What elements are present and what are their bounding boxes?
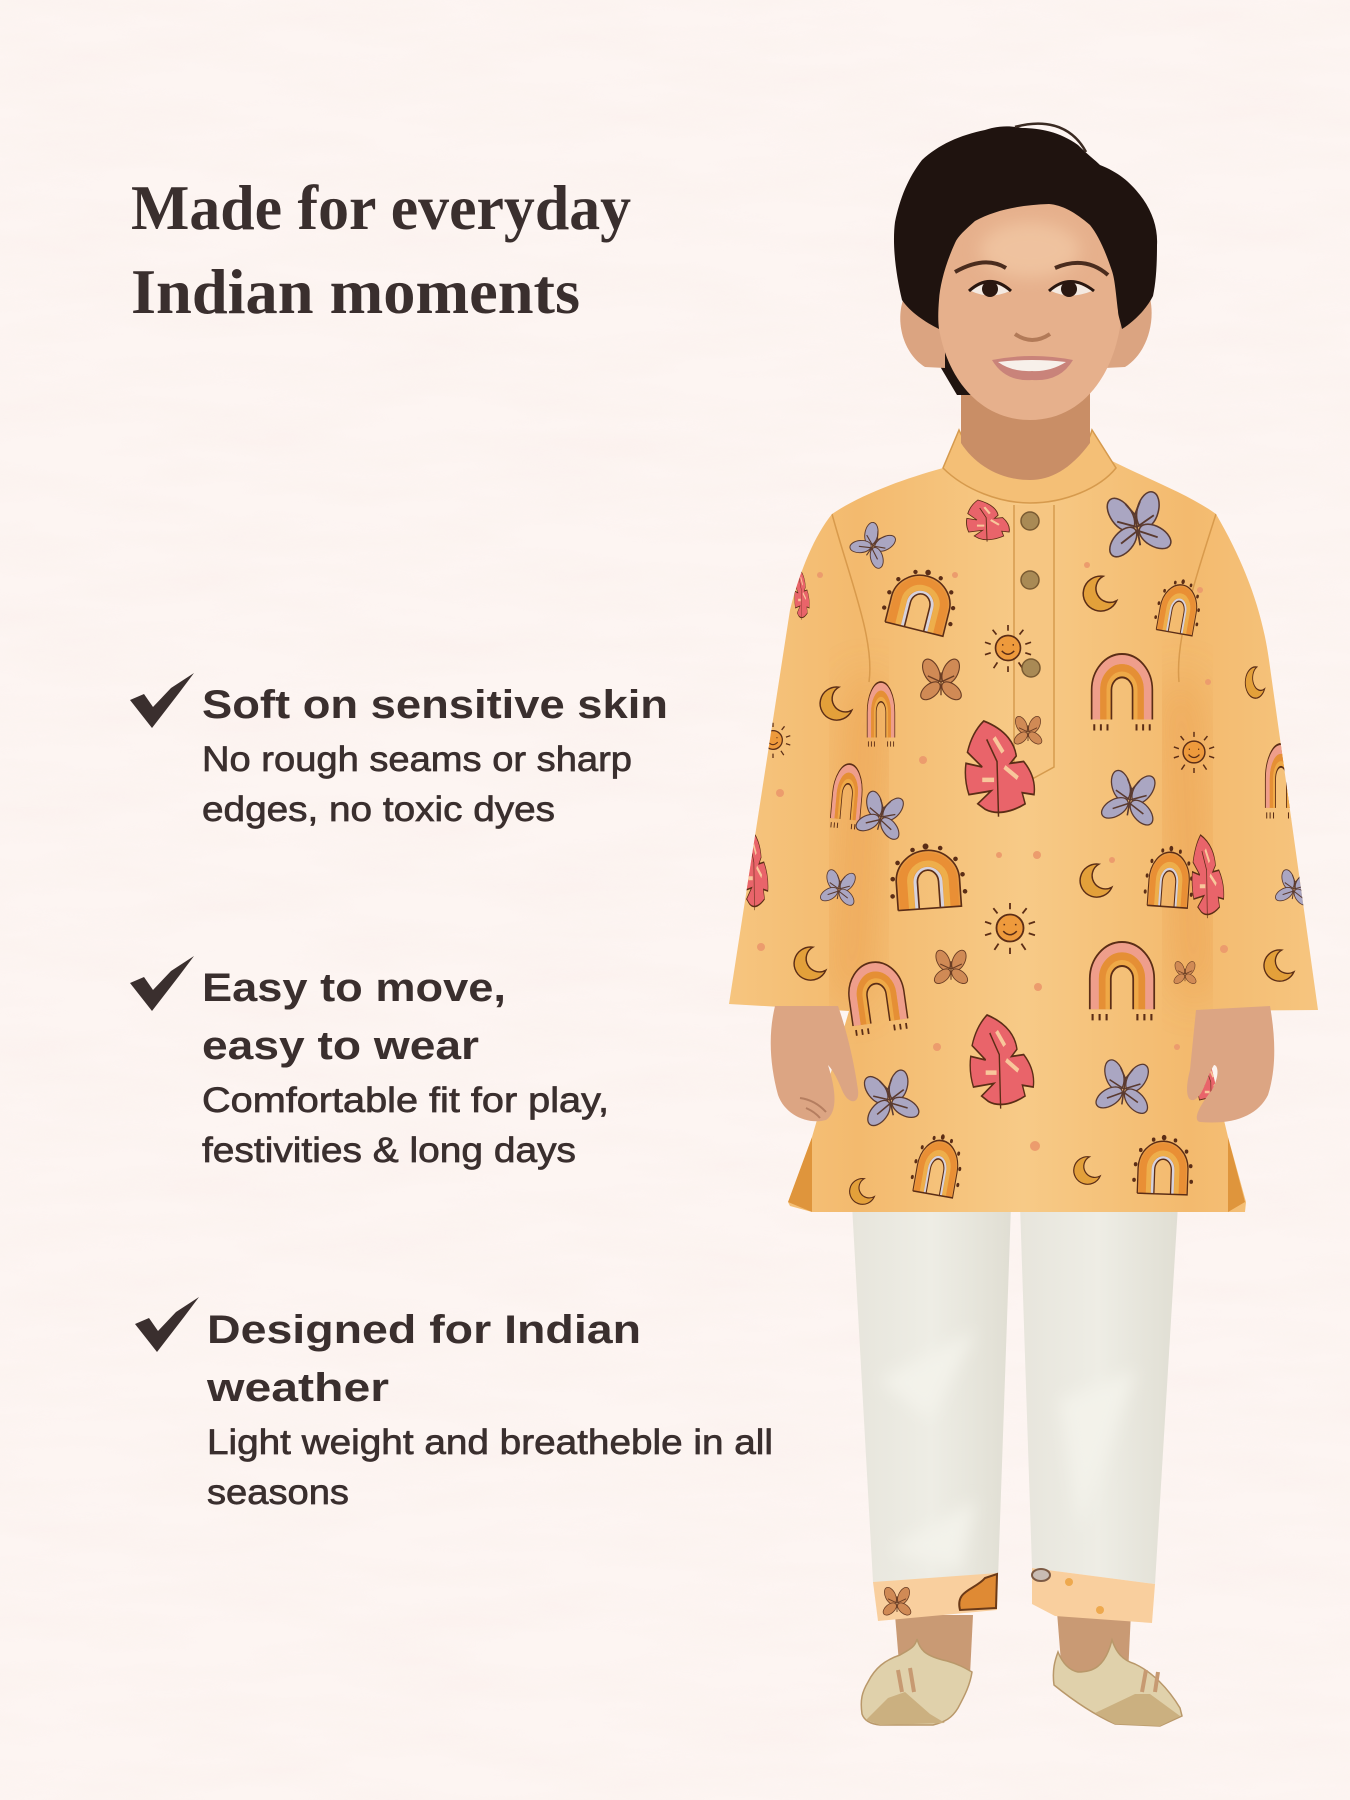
- collar: [943, 430, 1116, 503]
- heading: designed for Indian weather: Designed for Indian: [207, 1308, 641, 1352]
- title: Indian moments: [131, 256, 580, 327]
- nose: [1015, 334, 1050, 340]
- text: light weight: [207, 1423, 773, 1512]
- kurta print motifs: [742, 485, 1317, 1204]
- text: no rough seams: No rough seams or sharp: [202, 740, 632, 779]
- text: comfortable fit: Comfortable fit for play,: [202, 1081, 609, 1120]
- eyebrows: [955, 262, 1108, 275]
- ears: [900, 298, 1152, 368]
- kurta shading: [788, 514, 1245, 1212]
- right hand: [1187, 1006, 1274, 1123]
- text: light weight: Light weight and breatheble in all: [207, 1423, 773, 1462]
- illustration: boy in kurta: [729, 124, 1318, 1726]
- face: [937, 200, 1122, 420]
- title: Made for everyday: [131, 172, 631, 243]
- heading: easy to move, easy to wear: Easy to move,: [202, 966, 506, 1010]
- buttons: [1021, 512, 1040, 677]
- heading: designed for Indian weather: [206, 1308, 641, 1410]
- heading: easy to move, easy to wear: [202, 966, 506, 1068]
- eyes: [969, 281, 1094, 297]
- back hair: [935, 330, 975, 395]
- left hand: [771, 1006, 858, 1121]
- rainbows: [830, 561, 1297, 1199]
- placket: [1014, 505, 1054, 778]
- icon: check mark: [135, 1297, 199, 1352]
- text: no rough seams: [202, 740, 632, 829]
- feature: soft on sensitive skin: [130, 673, 668, 829]
- head: [894, 124, 1157, 420]
- polka dots: [757, 562, 1228, 1151]
- smiling suns: [756, 625, 1214, 954]
- heading: soft on sensitive skin: Soft on sensitive skin: [202, 683, 668, 727]
- text: comfortable fit: festivities & long days: [202, 1131, 576, 1170]
- text: light weight: seasons: [207, 1473, 349, 1512]
- heading: easy to move, easy to wear: easy to wear: [202, 1024, 479, 1068]
- smile: [992, 356, 1073, 380]
- monstera leaves: [742, 500, 1226, 1112]
- crescent moons: [794, 576, 1294, 1204]
- text: no rough seams: edges, no toxic dyes: [202, 790, 555, 829]
- left shoe: [861, 1639, 972, 1725]
- feature: designed for Indian weather: [135, 1297, 773, 1512]
- text: comfortable fit: [202, 1081, 609, 1170]
- heading: designed for Indian weather: weather: [206, 1366, 389, 1410]
- hair strand: [1015, 124, 1086, 152]
- kurta: [729, 430, 1318, 1212]
- butterflies: [817, 485, 1317, 1132]
- pants: left leg: [852, 1205, 1011, 1621]
- ankles: [895, 1612, 1131, 1675]
- hair: [894, 126, 1157, 329]
- pants: right leg: [1020, 1205, 1178, 1623]
- feature: easy to move: [130, 956, 609, 1170]
- forehead highlight: [980, 222, 1080, 278]
- icon: check mark: [130, 673, 194, 728]
- neck: [961, 385, 1090, 480]
- title: [131, 172, 631, 327]
- icon: check mark: [130, 956, 194, 1011]
- right shoe: [1053, 1640, 1182, 1726]
